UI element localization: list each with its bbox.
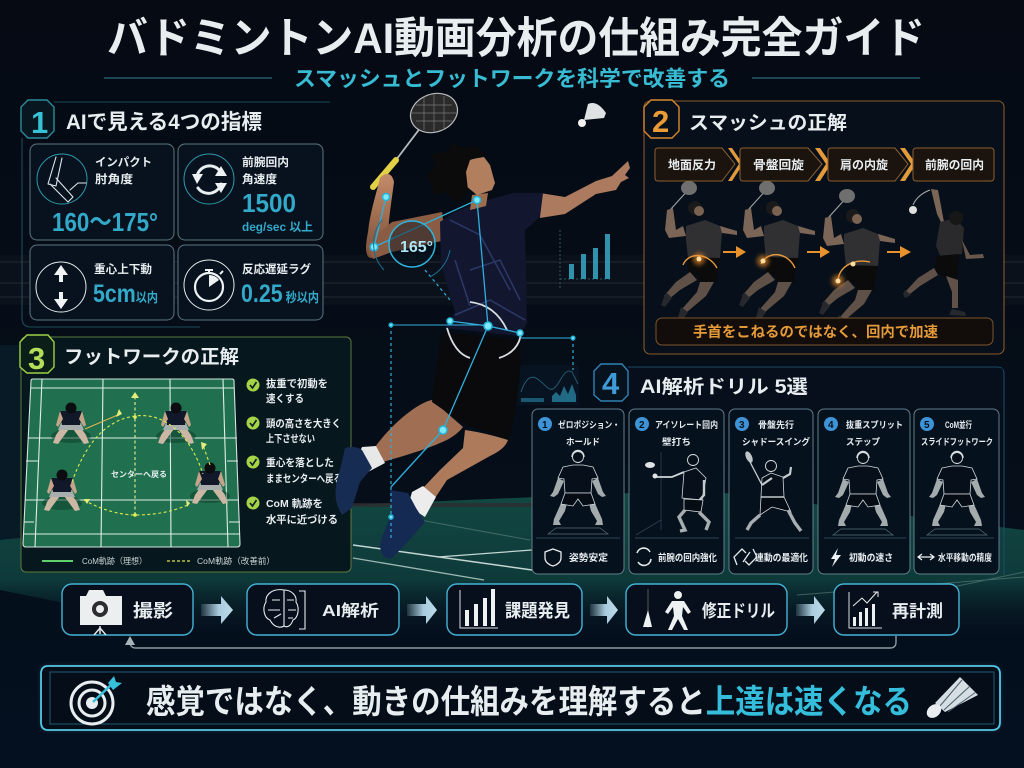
figure (636, 452, 709, 535)
hud bar chart (560, 230, 612, 288)
metric: reaction lag: 反応遅延ラグ (242, 262, 311, 276)
drill 2: アイソレート回内 (655, 419, 718, 430)
badge 4 (594, 364, 628, 401)
shuttlecock (578, 103, 606, 127)
drill 2: 前腕の回内強化 (658, 552, 717, 564)
callout: accelerate with pronation (656, 318, 993, 345)
figure (833, 452, 893, 535)
arrow 2 (807, 246, 830, 258)
far leg (375, 400, 463, 463)
metric: pronation speed: 角速度 (242, 172, 278, 186)
court diagram (23, 379, 240, 547)
icon: brain (264, 590, 305, 629)
hud line chart (517, 365, 579, 405)
heading 2: スマッシュの正解 (689, 112, 847, 134)
metric: elbow angle: 肘角度 (95, 172, 134, 186)
metric: centre of gravity (30, 245, 174, 320)
arrow (590, 596, 618, 624)
badge 4: 4 (602, 366, 620, 401)
step: capture: 撮影 (133, 601, 173, 621)
step: ground reaction (655, 148, 743, 181)
figure (927, 452, 987, 535)
far shoe (336, 447, 372, 515)
step: re-measure (834, 584, 959, 635)
icon: bolt (831, 548, 841, 567)
drill 1: 1 (542, 420, 548, 431)
elbow angle gauge: 165° (400, 239, 433, 256)
badge 3 (20, 335, 54, 376)
legend: CoM軌跡（改善前） (197, 556, 275, 566)
metric: centre of gravity: 重心上下動 (94, 262, 152, 276)
icon: shuttlecock (924, 677, 978, 721)
step: corrective drill: 修正ドリル (702, 601, 775, 621)
drill 4: 4 (828, 420, 834, 431)
elbow angle gauge (374, 220, 450, 277)
drill 4: 抜重スプリット (846, 419, 903, 430)
near leg (423, 430, 508, 498)
step: find issues (447, 584, 582, 635)
drill 3: 連動の最適化 (755, 552, 808, 564)
drill 1: ゼロポジション・ (558, 419, 620, 430)
point 2: 頭の高さを大きく (266, 417, 341, 430)
icon: rotate (184, 154, 234, 204)
movement paths (72, 398, 210, 515)
far sock (355, 446, 385, 473)
heading 3: フットワークの正解 (64, 346, 239, 368)
player frame 3 (819, 189, 895, 326)
point 2 (246, 416, 341, 445)
metric: reaction lag (178, 245, 323, 320)
players (42, 402, 230, 511)
pelvis rotation arcs (447, 302, 521, 358)
legend: CoM軌跡（理想） (82, 556, 147, 566)
player frame 4 (903, 189, 984, 316)
point 4 (246, 496, 338, 526)
title: バドミントンAI動画分析の仕組み完全ガイド (107, 15, 925, 63)
drill 5: CoM並行 (945, 419, 972, 430)
shirt (440, 193, 543, 336)
shorts (432, 332, 521, 440)
callout: accelerate with pronation: 手首をこねるのではなく、回内で加速 (693, 323, 938, 341)
workflow (62, 584, 959, 648)
drill 2: 2 (639, 420, 645, 431)
arrow (796, 596, 825, 624)
icon: shield (545, 549, 561, 566)
metric: pronation speed: 1500 (242, 188, 296, 218)
point 4: 水平に近づける (266, 513, 338, 526)
player frame 2 (739, 181, 815, 318)
loop-back arrow (125, 636, 896, 648)
badge 2 (644, 100, 679, 139)
icon: horizontal arrows (918, 554, 934, 560)
drill 5: 5 (924, 420, 930, 431)
point 2: 上下させない (266, 432, 315, 445)
drill 4: 初動の速さ (849, 552, 893, 564)
icon: target (71, 676, 122, 724)
drill 3: シャドースイング (742, 436, 810, 447)
step: corrective drill (626, 584, 787, 635)
drill 2: 壁打ち (662, 436, 691, 447)
racket arm (366, 174, 394, 258)
arrow 3 (887, 246, 911, 258)
badge 1: 1 (31, 105, 48, 140)
badge 3: 3 (28, 341, 45, 376)
takeaway message: 感覚ではなく、動きの仕組みを理解すると上達は速くなる (146, 683, 912, 720)
label: back to centre: センターへ戻る (111, 469, 167, 479)
near shoe (380, 490, 425, 558)
step: shoulder (828, 148, 916, 181)
figure (548, 450, 608, 534)
drill 4 (818, 409, 910, 574)
subtitle: スマッシュとフットワークを科学で改善する (294, 67, 730, 91)
step: pelvis: 骨盤回旋 (753, 157, 804, 172)
icon: bars (460, 589, 498, 628)
joints (370, 194, 575, 519)
point 1: 抜重で初動を (266, 377, 328, 390)
figure (744, 450, 801, 531)
drill 5 (914, 409, 999, 574)
step: capture (62, 584, 193, 635)
drill 5: スライドフットワーク (921, 437, 993, 447)
other arm (540, 161, 630, 218)
metric: pronation speed (178, 144, 323, 240)
point 1 (246, 377, 328, 405)
icon: growth chart (849, 592, 882, 628)
icon: camera (80, 590, 122, 635)
checklist (246, 377, 342, 526)
panel 2: smash (644, 100, 1004, 354)
legend (42, 556, 275, 566)
metric: elbow angle: 160〜175° (52, 207, 158, 237)
point 3: ままセンターへ戻る (266, 473, 342, 485)
metric: elbow angle: インパクト (95, 156, 152, 169)
point 4: CoM 軌跡を (266, 497, 323, 510)
step: ground reaction: 地面反力 (668, 157, 716, 172)
panel 4: drills (532, 364, 1004, 575)
arrow (407, 596, 437, 624)
arrow 1 (723, 246, 746, 258)
panel 1: four metrics (21, 100, 330, 327)
step: find issues: 課題発見 (505, 601, 570, 621)
takeaway banner (41, 666, 1000, 730)
arrow (201, 596, 233, 624)
point 3: 重心を落とした (266, 456, 334, 469)
metric: pronation speed: deg/sec 以上 (242, 220, 313, 234)
drill 3: 3 (739, 420, 745, 431)
icon: link (734, 549, 757, 565)
icon: elbow (37, 154, 87, 204)
head (427, 143, 495, 210)
kinetic chain steps (655, 148, 994, 181)
step: forearm: 前腕の回内 (925, 157, 984, 172)
heading 4: AI解析ドリル 5選 (640, 376, 808, 398)
drill 1: ホールド (566, 437, 600, 447)
badge 2: 2 (652, 104, 669, 139)
central player (336, 87, 630, 558)
icon: up down arrows (36, 262, 86, 312)
metric: reaction lag: 0.25 秒以内 (241, 280, 319, 308)
badge 1 (21, 100, 54, 140)
near sock (408, 486, 436, 517)
step: re-measure: 再計測 (892, 602, 943, 621)
icon: cone and person (643, 589, 691, 630)
step: pelvis (740, 148, 831, 181)
point 3 (246, 456, 342, 485)
drill 3: 骨盤先行 (758, 419, 794, 430)
point 1: 速くする (266, 392, 304, 405)
icon: stopwatch (184, 260, 234, 310)
player frame 1 (661, 181, 737, 318)
step: shoulder: 肩の内旋 (840, 157, 888, 172)
drill 1: 姿勢安定 (569, 552, 608, 564)
metric: pronation speed: 前腕回内 (242, 155, 289, 169)
skeleton overlay (374, 197, 573, 540)
drill 1 (532, 409, 624, 574)
step: forearm (913, 148, 994, 181)
step: analyse (247, 584, 399, 635)
drill 4: ステップ (846, 437, 880, 447)
panel 3: footwork (20, 335, 351, 572)
metric: centre of gravity: 5cm以内 (93, 280, 158, 308)
drill 5: 水平移動の精度 (938, 552, 992, 564)
metric: elbow angle (30, 144, 174, 240)
heading 1: AIで見える4つの指標 (66, 111, 262, 134)
step: analyse: AI解析 (322, 601, 379, 620)
racket (373, 87, 463, 187)
drill 3 (729, 409, 813, 574)
icon: rotate (637, 548, 651, 565)
drill 2 (629, 409, 724, 574)
